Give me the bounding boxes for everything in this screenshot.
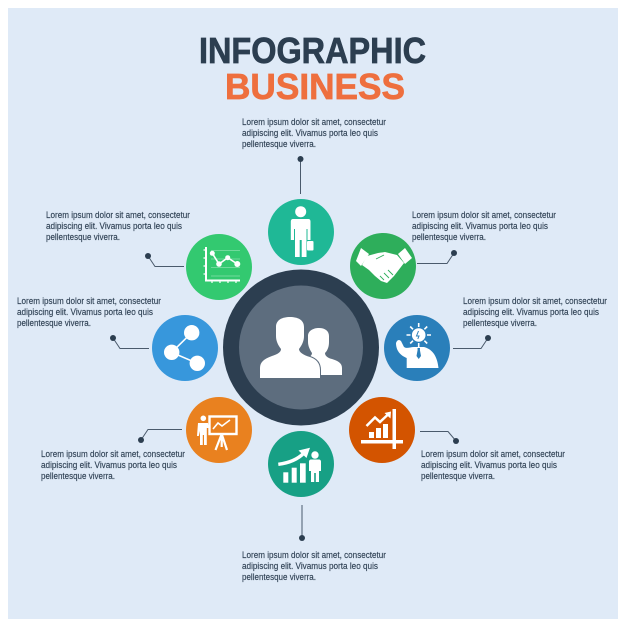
text block: upper right: pellentesque viverra. (412, 232, 486, 243)
text block: bottom: adipiscing elit. Vivamus porta leo quis (242, 561, 378, 572)
text block: top: pellentesque viverra. (242, 139, 316, 150)
node: businessman (268, 199, 334, 265)
text block: middle right: adipiscing elit. Vivamus porta leo quis (463, 307, 599, 318)
connector: middle left (110, 335, 149, 348)
text block: bottom: pellentesque viverra. (242, 572, 316, 583)
text block: lower left: pellentesque viverra. (41, 471, 115, 482)
node: share (152, 315, 218, 381)
text block: upper right: adipiscing elit. Vivamus porta leo quis (412, 221, 548, 232)
text block: lower left: adipiscing elit. Vivamus porta leo quis (41, 460, 177, 471)
connector: lower left (138, 430, 182, 443)
text block: middle right: pellentesque viverra. (463, 318, 537, 329)
heading: infographic: INFOGRAPHIC (199, 30, 426, 71)
text block: upper left: adipiscing elit. Vivamus porta leo quis (46, 221, 182, 232)
icon: idea man (396, 323, 438, 368)
node: growth with person (268, 431, 334, 497)
node: presentation (186, 397, 252, 463)
text block: middle left: adipiscing elit. Vivamus porta leo quis (17, 307, 153, 318)
text block: upper right (412, 210, 557, 243)
icon: handshake (356, 248, 412, 283)
text block: lower right: pellentesque viverra. (421, 471, 495, 482)
text block: upper left: Lorem ipsum dolor sit amet, consectetur (46, 210, 191, 221)
text block: middle left: Lorem ipsum dolor sit amet, consectetur (17, 296, 162, 307)
central hub (223, 270, 379, 426)
node: handshake (350, 233, 416, 299)
text block: upper left (46, 210, 191, 243)
text block: lower left: Lorem ipsum dolor sit amet, consectetur (41, 449, 186, 460)
icon: two people (260, 317, 342, 378)
connector: middle right (453, 335, 491, 348)
connector: lower right (420, 432, 459, 444)
connector: upper right (417, 250, 457, 264)
text block: middle right (463, 296, 608, 329)
heading: business: BUSINESS (225, 66, 405, 107)
icon: presentation (197, 416, 236, 450)
text block: lower right: Lorem ipsum dolor sit amet, consectetur (421, 449, 566, 460)
node: idea man (384, 315, 450, 381)
icon: growth chart (361, 409, 403, 449)
connector: top (298, 156, 304, 194)
text block: lower right (421, 449, 566, 482)
text block: upper left: pellentesque viverra. (46, 232, 120, 243)
connector: bottom (299, 505, 305, 541)
text block: top (242, 117, 387, 150)
icon: line chart (204, 247, 240, 283)
icon: businessman (291, 206, 314, 257)
text block: upper right: Lorem ipsum dolor sit amet, consectetur (412, 210, 557, 221)
title (199, 30, 426, 107)
text block: top: Lorem ipsum dolor sit amet, consectetur (242, 117, 387, 128)
text block: lower right: adipiscing elit. Vivamus porta leo quis (421, 460, 557, 471)
text block: bottom (242, 550, 387, 583)
text block: bottom: Lorem ipsum dolor sit amet, consectetur (242, 550, 387, 561)
text block: middle left (17, 296, 162, 329)
node: growth chart (349, 397, 415, 463)
connector: upper left (145, 253, 184, 266)
text block: middle left: pellentesque viverra. (17, 318, 91, 329)
icon: growth with person (278, 448, 321, 483)
node: line chart (186, 234, 252, 300)
text block: lower left (41, 449, 186, 482)
icon: share (164, 325, 205, 371)
text block: top: adipiscing elit. Vivamus porta leo quis (242, 128, 378, 139)
